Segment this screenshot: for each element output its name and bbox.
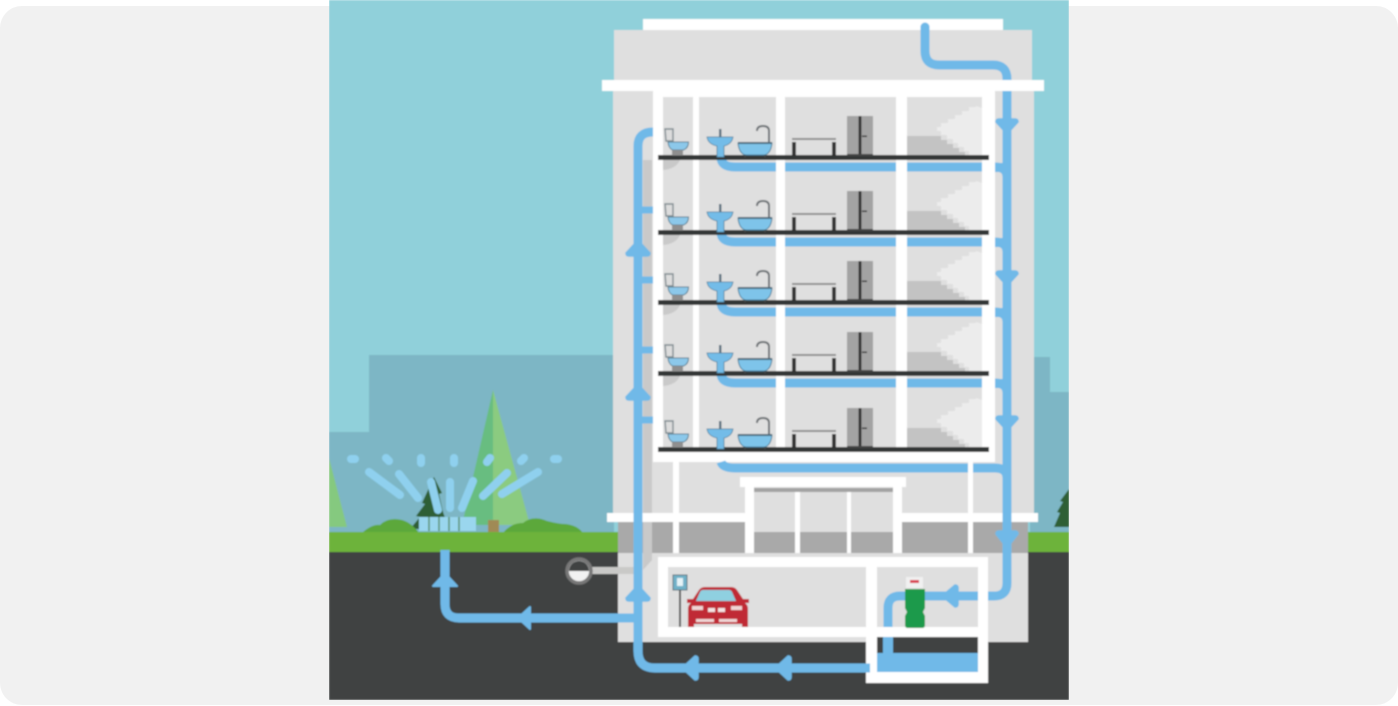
toilet waste blobs xyxy=(663,160,680,386)
room column dividers xyxy=(774,162,996,388)
parking sign xyxy=(673,575,687,627)
green treatment unit xyxy=(905,577,925,628)
treatment pipe into tank xyxy=(888,596,978,627)
roof white band xyxy=(602,80,1044,91)
street level dark band xyxy=(618,522,1028,553)
building body xyxy=(613,30,1034,642)
treatment arrow xyxy=(942,585,958,607)
ground floor structure xyxy=(607,462,1038,553)
main grey water riser xyxy=(988,91,1007,596)
right edge dark pine tree xyxy=(1054,489,1069,527)
sky xyxy=(329,0,1069,533)
background city skyline xyxy=(329,355,1069,537)
riser arrows xyxy=(996,119,1018,548)
recycled water riser xyxy=(638,132,870,668)
fixtures floor 4 xyxy=(665,332,873,373)
room interiors xyxy=(663,97,982,449)
sewer stub over building xyxy=(618,567,635,574)
reconnect drain stubs between frame and riser xyxy=(995,163,1003,388)
water storage tank xyxy=(866,637,988,683)
roof top bar xyxy=(643,19,1003,30)
floor drain pipes xyxy=(721,157,1007,393)
upper floors frame xyxy=(653,91,995,462)
roof collection pipe xyxy=(925,27,1007,99)
sprinkler water spray xyxy=(351,458,558,531)
left edge tree xyxy=(329,458,347,527)
grass xyxy=(329,532,1069,552)
floor slabs xyxy=(658,155,989,452)
fixtures floor 1 xyxy=(665,116,873,157)
tall tree xyxy=(462,390,530,533)
fixtures floor 3 xyxy=(665,261,873,302)
underground xyxy=(329,552,1069,700)
fixtures floor 2 xyxy=(665,191,873,232)
entrance xyxy=(740,477,906,553)
recycled water branches xyxy=(638,210,653,420)
small dark pine tree xyxy=(412,476,446,530)
soil pipe xyxy=(643,160,652,570)
irrigation pipe xyxy=(433,550,634,629)
bushes xyxy=(362,518,583,533)
basement frame xyxy=(658,557,988,637)
last floor drain pipe xyxy=(721,462,1007,478)
infographic: building water system xyxy=(329,0,1069,700)
sewer outlet pipe xyxy=(567,559,635,583)
staircases xyxy=(907,106,982,447)
fixtures floor 5 xyxy=(665,408,873,449)
red car xyxy=(687,587,749,627)
recycled riser arrows xyxy=(626,240,791,680)
